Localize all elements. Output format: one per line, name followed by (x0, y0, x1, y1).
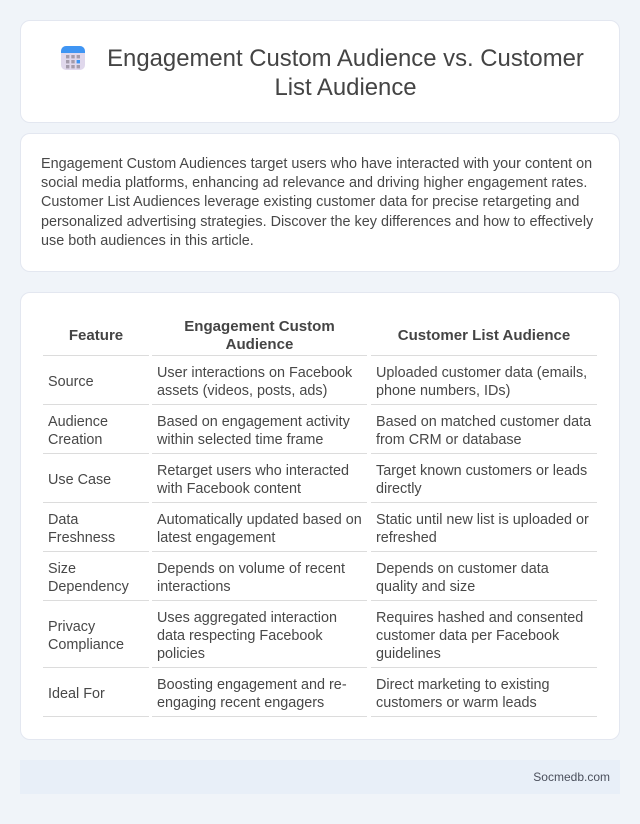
row: audience creation: Based on engagement activity (157, 414, 350, 430)
footer source text: Socmedb.com (533, 770, 610, 784)
row: data freshness: Automatically updated based on (157, 512, 362, 528)
row: ideal for: Boosting engagement and re- (157, 677, 347, 693)
row: audience creation: Based on matched customer data (376, 414, 591, 430)
row: data freshness: Freshness (48, 530, 115, 546)
intro text: Engagement Custom Audiences target users who have interacted with your content on (41, 156, 592, 172)
footer (20, 760, 620, 794)
table header (69, 318, 570, 353)
row: data freshness: Static until new list is uploaded or (376, 512, 589, 528)
intro text: use both audiences in this article. (41, 233, 254, 249)
row: size dependency: Depends on customer data (376, 561, 549, 577)
panel: title (20, 20, 620, 123)
row: privacy compliance: data respecting Facebook (157, 628, 323, 644)
row: size dependency: interactions (157, 579, 231, 595)
row: privacy compliance: guidelines (376, 646, 441, 662)
icon: calendar (61, 46, 85, 70)
row: source (48, 365, 587, 399)
table header: Customer List Audience (398, 327, 570, 344)
row: audience creation: Creation (48, 432, 102, 448)
table header: Audience (226, 336, 293, 353)
row: privacy compliance: policies (157, 646, 205, 662)
row: data freshness: latest engagement (157, 530, 275, 546)
row: privacy compliance (48, 610, 583, 662)
row: data freshness (48, 512, 589, 546)
row: size dependency: Depends on volume of recent (157, 561, 345, 577)
intro text (41, 156, 594, 249)
row: source: User interactions on Facebook (157, 365, 352, 381)
intro text: social media platforms, enhancing ad relevance and driving higher engagement rates. (41, 175, 587, 191)
row: use case: with Facebook content (157, 481, 301, 497)
row: source: assets (videos, posts, ads) (157, 383, 327, 399)
heading: List Audience (274, 74, 417, 101)
row: data freshness: Data (48, 512, 78, 528)
row: size dependency (48, 561, 549, 595)
row: size dependency: Dependency (48, 579, 129, 595)
row: audience creation: from CRM or database (376, 432, 522, 448)
row: privacy compliance: Uses aggregated interaction (157, 610, 337, 626)
row: use case: Target known customers or leads (376, 463, 587, 479)
row: source: Uploaded customer data (emails, (376, 365, 587, 381)
intro text: personalized advertising strategies. Discover the key differences and how to effectively (41, 214, 593, 230)
row: privacy compliance: customer data per Facebook (376, 628, 559, 644)
row: use case: Retarget users who interacted (157, 463, 349, 479)
row: use case: Use Case (48, 472, 111, 488)
row: size dependency: Size (48, 561, 76, 577)
heading (107, 45, 584, 101)
row: source: phone numbers, IDs) (376, 383, 510, 399)
table header: Feature (69, 327, 123, 344)
row: audience creation (48, 414, 592, 448)
row: use case (48, 463, 587, 497)
row: ideal for (48, 677, 550, 711)
row: use case: directly (376, 481, 422, 497)
heading: Engagement Custom Audience vs. Customer (107, 45, 584, 72)
row: ideal for: Ideal For (48, 686, 105, 702)
row: size dependency: quality and size (376, 579, 475, 595)
row: audience creation: Audience (48, 414, 108, 430)
row: ideal for: engaging recent engagers (157, 695, 324, 711)
row: source: Source (48, 374, 94, 390)
panel: comparison table (20, 292, 620, 740)
row: privacy compliance: Compliance (48, 637, 124, 653)
row: data freshness: refreshed (376, 530, 437, 546)
panel: introduction (20, 133, 620, 272)
row: privacy compliance: Requires hashed and consented (376, 610, 583, 626)
intro text: Customer List Audiences leverage existing customer data for precise retargeting and (41, 194, 579, 210)
row: ideal for: customers or warm leads (376, 695, 537, 711)
row: ideal for: Direct marketing to existing (376, 677, 550, 693)
table header: Engagement Custom (184, 318, 335, 335)
row: audience creation: within selected time frame (157, 432, 323, 448)
row: privacy compliance: Privacy (48, 619, 95, 635)
